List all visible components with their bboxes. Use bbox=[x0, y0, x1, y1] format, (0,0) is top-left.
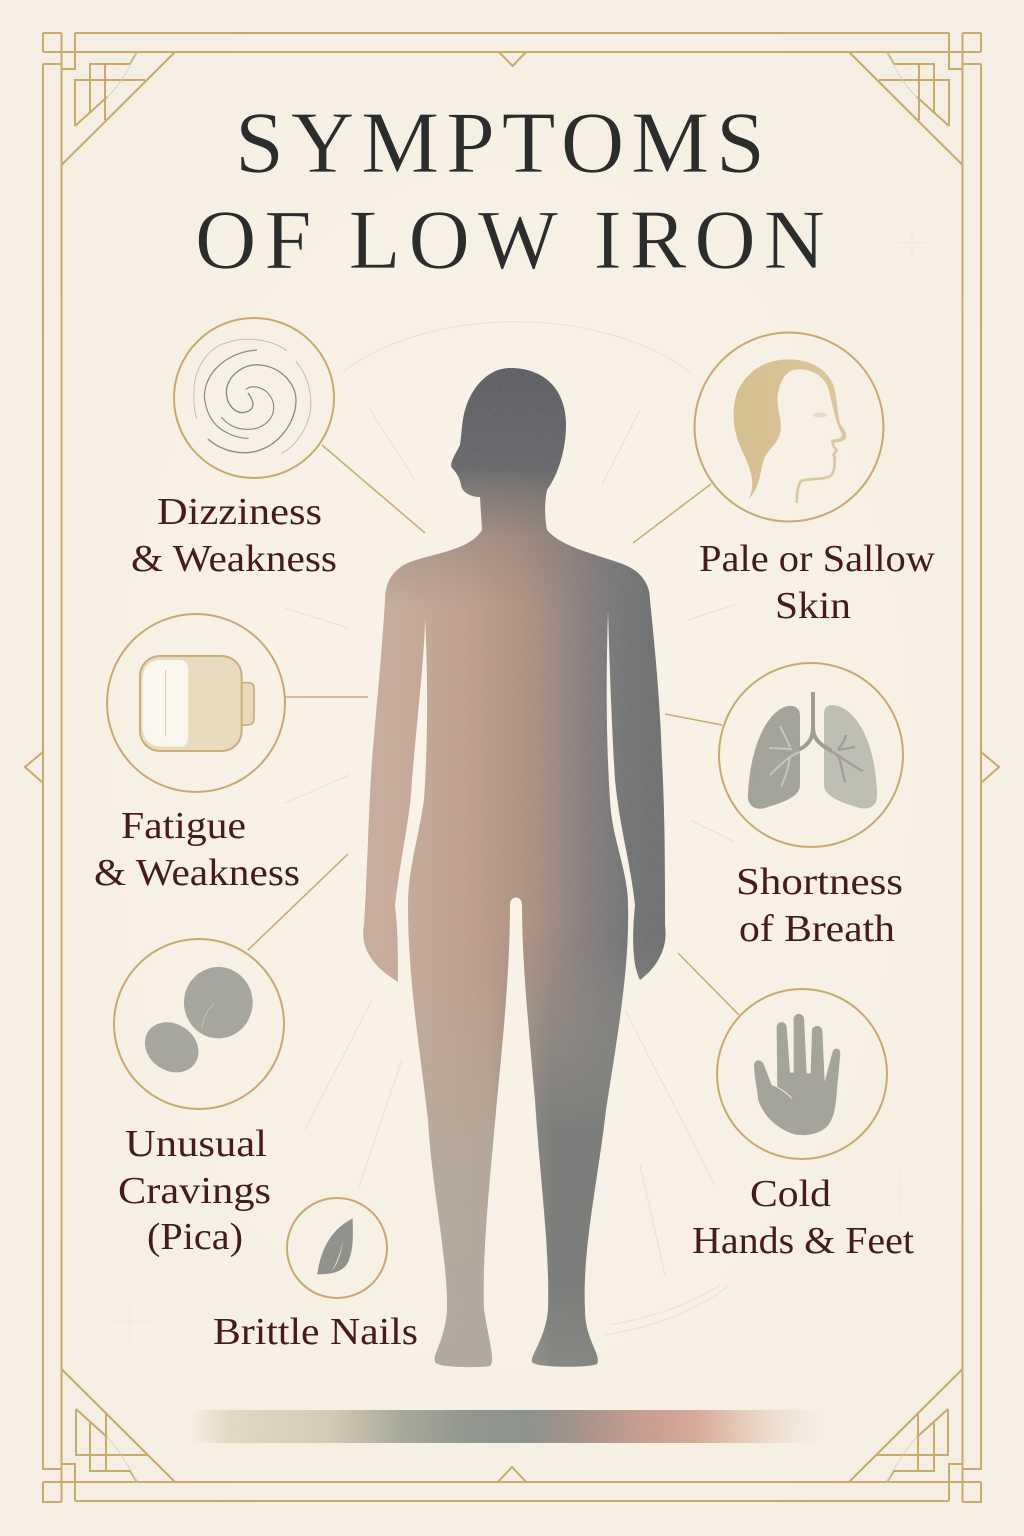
title: OF LOW IRON bbox=[195, 193, 825, 287]
icon: spiral bbox=[194, 339, 311, 453]
leader line bbox=[665, 714, 722, 725]
leader line bbox=[285, 696, 368, 698]
callout: cold hands bbox=[678, 953, 914, 1262]
frame: bottom-right corner fan bbox=[849, 1369, 962, 1482]
callout: shortness of breath bbox=[665, 663, 903, 950]
label: Dizziness bbox=[157, 491, 322, 533]
leader line bbox=[248, 854, 348, 950]
label: Hands & Feet bbox=[692, 1220, 914, 1262]
label: Cold bbox=[750, 1173, 831, 1215]
icon circle bbox=[694, 332, 884, 522]
figure: head and feet vertical tone bbox=[386, 368, 623, 1368]
icon: pebbles bbox=[135, 967, 253, 1083]
frame: bottom-left corner fan bbox=[62, 1369, 175, 1482]
icon circle bbox=[174, 318, 334, 478]
label: Shortness bbox=[736, 861, 903, 903]
icon circle bbox=[717, 989, 887, 1159]
label: (Pica) bbox=[147, 1216, 243, 1258]
icon circle bbox=[287, 1198, 387, 1298]
label: Fatigue bbox=[121, 805, 246, 847]
label: & Weakness bbox=[94, 852, 300, 894]
icon: low battery mug bbox=[140, 656, 254, 751]
icon circle bbox=[107, 614, 285, 792]
callout: fatigue bbox=[94, 614, 368, 894]
icon: lungs bbox=[748, 692, 877, 809]
label: Unusual bbox=[125, 1123, 267, 1165]
label bbox=[699, 538, 936, 627]
faint radiating rays and arcs bbox=[106, 225, 927, 1342]
label: Brittle Nails bbox=[213, 1311, 418, 1353]
callout: cravings bbox=[114, 854, 348, 1258]
leader line bbox=[633, 484, 711, 543]
frame: top-left corner fan bbox=[62, 52, 175, 165]
icon: head profile bbox=[734, 359, 846, 503]
figure: base horizontal gradient bbox=[363, 471, 666, 1345]
icon: nail shard bbox=[317, 1218, 353, 1274]
icon circle bbox=[719, 663, 903, 847]
label: of Breath bbox=[739, 908, 895, 950]
label bbox=[692, 1173, 914, 1262]
frame: top-right corner fan bbox=[849, 52, 962, 165]
leader line bbox=[678, 953, 739, 1015]
callout: pale skin bbox=[633, 332, 936, 627]
figure: right leg grey bbox=[525, 967, 618, 1367]
title: SYMPTOMS bbox=[235, 95, 765, 192]
label: Cravings bbox=[118, 1170, 271, 1212]
label bbox=[131, 491, 337, 580]
icon circle bbox=[114, 939, 284, 1109]
callout: dizziness bbox=[131, 318, 425, 580]
label bbox=[736, 861, 903, 950]
title bbox=[195, 95, 825, 287]
label: & Weakness bbox=[131, 538, 337, 580]
label bbox=[94, 805, 300, 894]
label: Pale or Sallow bbox=[699, 538, 936, 580]
icon: hand bbox=[754, 1014, 840, 1135]
callout: brittle nails bbox=[213, 1198, 418, 1353]
label bbox=[118, 1123, 271, 1258]
label: Skin bbox=[775, 585, 851, 627]
bottom gradient bar bbox=[190, 1410, 830, 1443]
leader line bbox=[322, 445, 425, 533]
human silhouette bbox=[350, 360, 680, 1375]
